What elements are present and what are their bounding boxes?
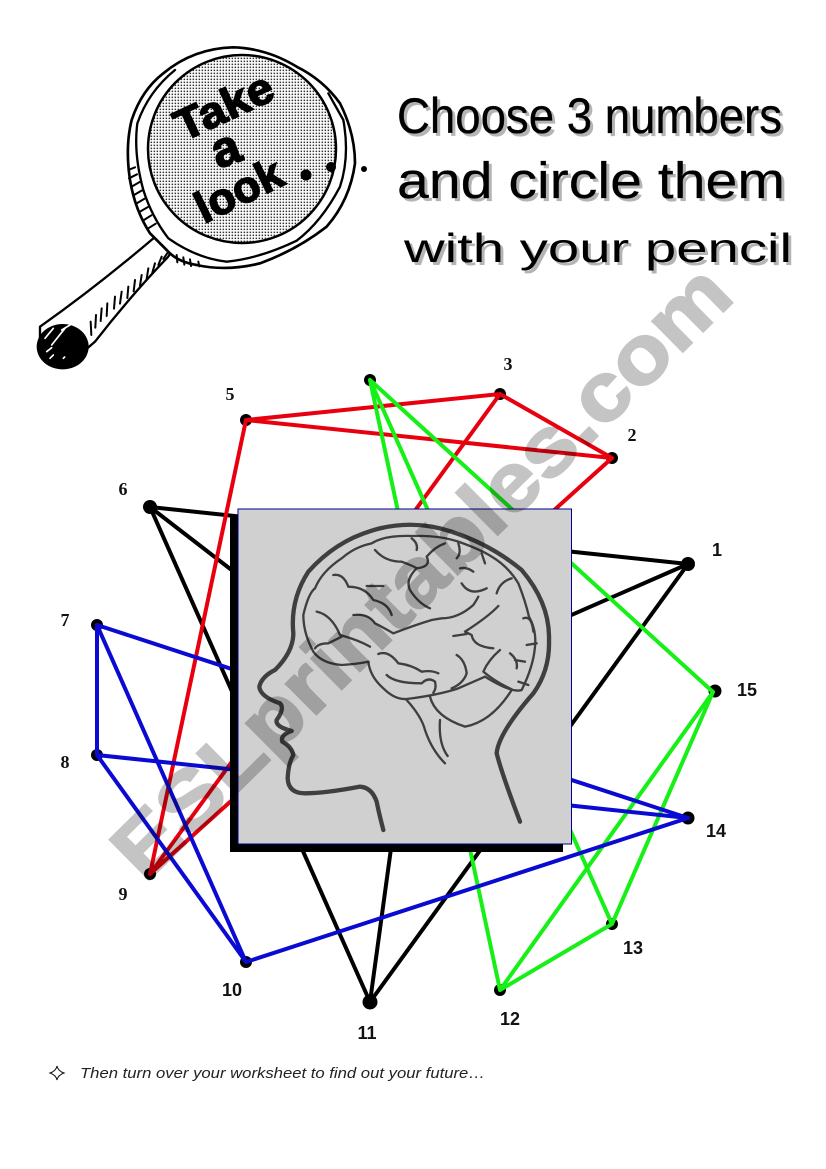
network diagram of numbered points [60,354,757,1043]
brain outline and folds [303,536,537,763]
magnifier handle [37,236,172,369]
heading line 1: Choose 3 numbers [397,88,782,144]
number labels: 13 [623,938,643,958]
magnifier frame [128,47,355,268]
heading line 3: with your pencil [403,225,792,271]
panel: brain illustration [230,509,572,852]
number labels: 9 [118,884,128,904]
number labels: 7 [60,610,70,630]
number labels [60,354,757,1043]
magnifier text: look [187,148,292,233]
black connecting lines [150,507,688,1002]
footer text: Then turn over your worksheet to find out your future… [80,1065,485,1082]
head and brain line drawing [259,525,549,830]
magnifier text [167,63,292,233]
magnifier text: a [203,117,249,179]
magnifier lens halftone [148,55,336,243]
number labels: 8 [60,752,70,772]
magnifier text: Take [167,63,281,151]
number labels: 12 [500,1009,520,1029]
footer note [50,1065,485,1082]
number labels: 1 [712,540,722,560]
number labels: 10 [222,980,242,1000]
heading: instructions [397,88,792,271]
number labels: 3 [504,354,512,374]
number labels: 11 [357,1023,377,1043]
icon: magnifying glass with "Take a look" [37,47,367,369]
icon: four-point star bullet [50,1066,64,1080]
red connecting lines [150,394,612,874]
panel background [238,509,572,844]
number labels: 5 [226,384,234,404]
watermark: ESLprintables.com [94,247,749,897]
green connecting lines [370,380,713,990]
head outline [259,525,549,830]
panel shadow [230,515,563,852]
ellipsis dots [300,162,367,180]
point markers [91,374,722,1010]
heading line 2: and circle them [397,152,785,209]
number labels: 6 [118,479,128,499]
number labels: 14 [706,821,726,841]
number labels: 15 [737,680,757,700]
blue connecting lines [97,625,688,962]
number labels: 2 [628,425,636,445]
